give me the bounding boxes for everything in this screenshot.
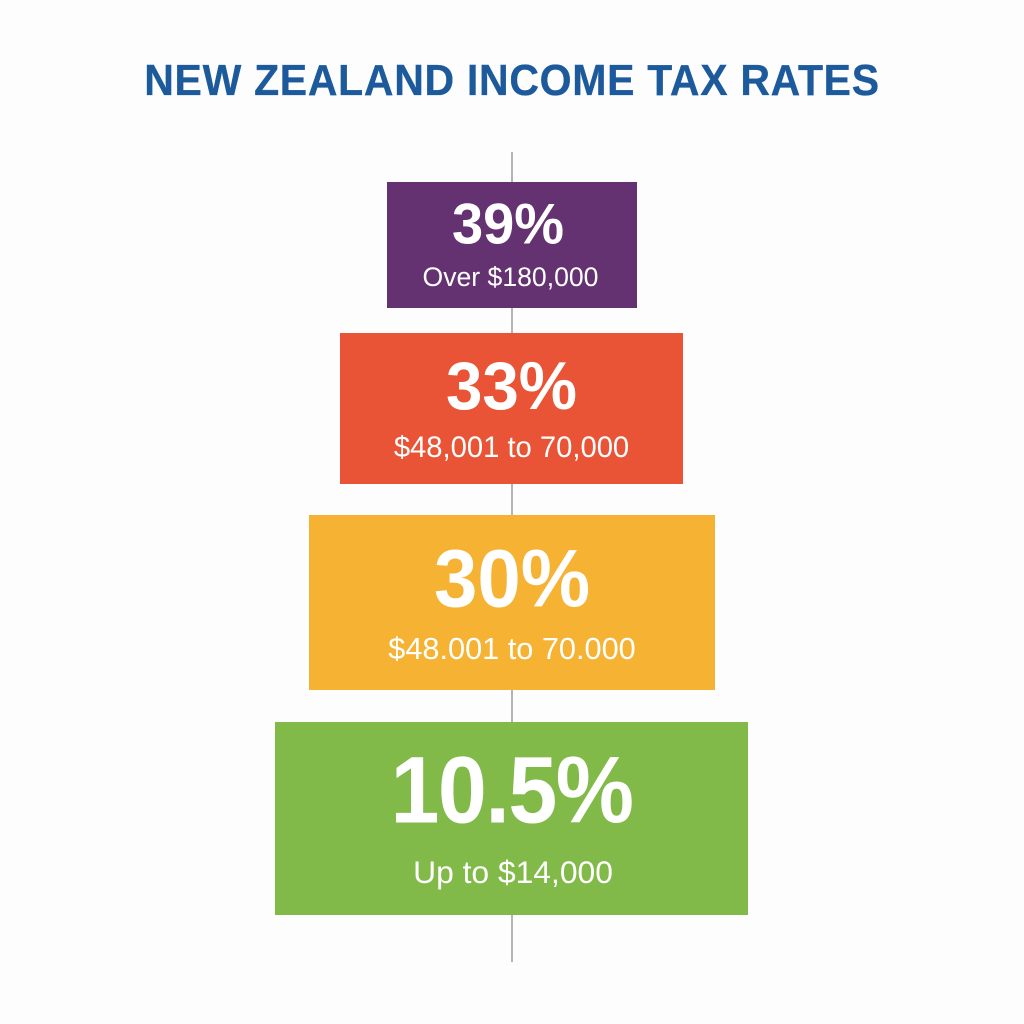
range $48.001 to 70.000: $48.001 to 70.000	[388, 631, 636, 666]
rate 33%: 33%	[446, 348, 577, 423]
central axis line	[511, 152, 513, 962]
title: NEW ZEALAND INCOME TAX RATES	[144, 55, 880, 105]
tier: 39%	[387, 182, 637, 308]
tier: 33%	[340, 333, 683, 484]
range $48,001 to 70,000: $48,001 to 70,000	[394, 432, 629, 464]
tier: 30%	[309, 515, 715, 690]
rate 30%: 30%	[434, 532, 590, 624]
rate 10.5%: 10.5%	[390, 736, 633, 843]
range up to $14,000: Up to $14,000	[413, 854, 613, 890]
range over $180,000: Over $180,000	[423, 262, 598, 292]
tier: 10.5%	[275, 722, 748, 915]
rate 39%: 39%	[452, 191, 564, 256]
